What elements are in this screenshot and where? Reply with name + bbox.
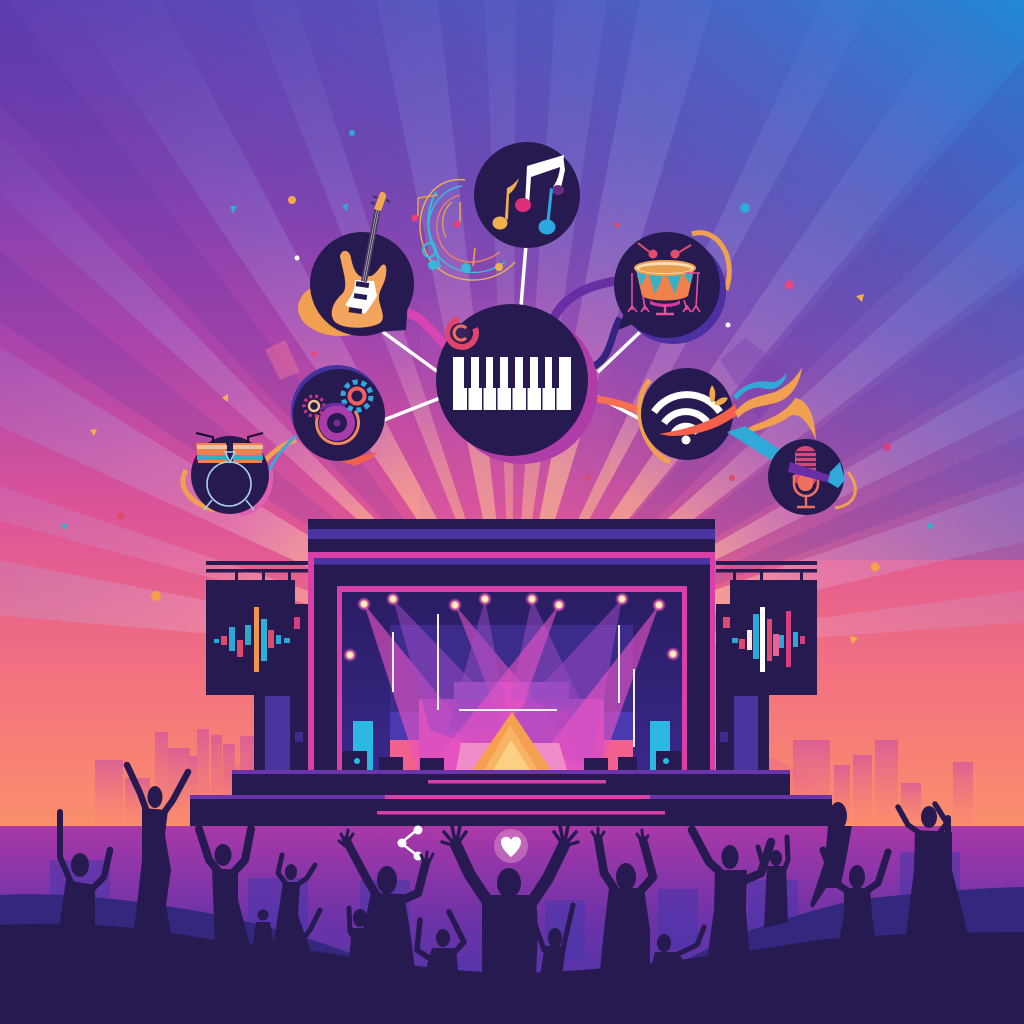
person: small front inner left [348, 908, 378, 970]
icon: drum kit [183, 433, 270, 514]
icon: heart [494, 829, 528, 863]
icon: wifi with ribbons [640, 367, 816, 472]
stage lamps [343, 592, 680, 662]
person: inner left [339, 830, 433, 970]
icon: microphone [768, 439, 855, 515]
icon: centre keyboard [436, 304, 598, 464]
icon: C badge [444, 315, 480, 351]
right screen waveform [723, 607, 805, 672]
person: right [692, 830, 771, 960]
white light rods [392, 614, 635, 747]
back hills [0, 887, 1024, 1024]
music notes swirl [412, 180, 515, 280]
stage platforms [190, 770, 832, 826]
person: small front left of centre [417, 912, 464, 972]
person: far right tall [898, 804, 968, 935]
icon: gears and vinyl [291, 365, 385, 466]
centre pyramid [456, 712, 567, 770]
person: right of centre [592, 828, 653, 970]
person: small right [758, 837, 788, 928]
person: tall on left [127, 765, 188, 935]
ground behind crowd [0, 716, 1024, 1024]
stage roof and frame [308, 519, 715, 770]
person: jumping below stage edge [810, 802, 852, 908]
connector lines between icons [383, 245, 642, 420]
icon: electric guitar [298, 192, 414, 336]
person: small left [272, 855, 315, 955]
distant city right [793, 740, 973, 826]
person: small front right [650, 927, 704, 972]
sunburst rays [0, 0, 1024, 732]
icon: snare drum [614, 232, 726, 344]
person: far left [58, 812, 110, 935]
person: centre [442, 826, 578, 975]
icon: share [398, 826, 422, 860]
light beams [364, 599, 659, 770]
ribbons linking icons [254, 233, 729, 480]
crowd silhouettes [58, 765, 968, 975]
stage backdrop [390, 625, 633, 770]
distant city left [95, 729, 254, 826]
person: small front right of centre [536, 905, 573, 975]
left screen waveform [214, 607, 300, 672]
person: left centre [199, 829, 251, 945]
speakers and monitors [342, 721, 681, 770]
confetti [61, 130, 933, 644]
person: far right front [823, 850, 888, 945]
front hill [0, 924, 1024, 1024]
person: front small left [252, 910, 320, 950]
icon: music notes [474, 142, 580, 248]
stage lighting rig side towers [206, 561, 817, 770]
